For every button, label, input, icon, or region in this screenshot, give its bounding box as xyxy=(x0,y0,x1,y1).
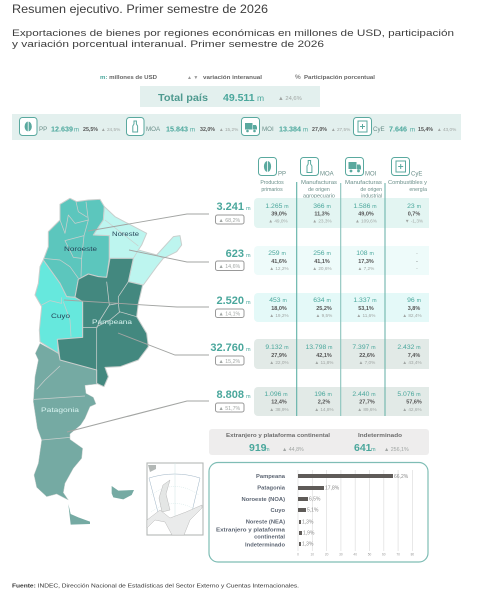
region: Noroeste xyxy=(43,198,109,297)
values Noroeste: ▼ -1,3% xyxy=(405,218,423,224)
values Pampeana: ▲ 7,0% xyxy=(359,360,375,365)
column: CyE: energía xyxy=(409,187,427,193)
values Patagonia: ▲ 89,6% xyxy=(357,407,377,412)
subtitle: y variación porcentual interanual. Primer semestre de 2026 xyxy=(12,39,324,50)
values Cuyo: 634 m xyxy=(313,297,331,304)
values Noreste: - xyxy=(416,251,418,257)
total Pampeana: 32.760 xyxy=(210,342,244,354)
bar values: 17,8% xyxy=(325,486,340,492)
values Pampeana: ▲ 22,0% xyxy=(269,360,289,365)
values Pampeana xyxy=(265,344,422,365)
subtitle xyxy=(12,28,454,50)
values Cuyo: 1.337 m xyxy=(353,297,377,304)
values Cuyo: ▲ 11,6% xyxy=(357,313,375,318)
total país: ▲ 24,6% xyxy=(278,96,302,102)
column: MOA: Manufacturas xyxy=(301,180,337,186)
values Patagonia: 12,4% xyxy=(271,400,287,406)
legend xyxy=(100,74,376,81)
values Pampeana: ▲ 11,8% xyxy=(315,360,333,365)
values Noreste: 41,6% xyxy=(271,259,287,265)
total país xyxy=(140,86,320,107)
bars xyxy=(298,474,393,546)
region labels: Cuyo xyxy=(51,313,70,320)
values Pampeana: 9.132 m xyxy=(265,344,289,351)
values Pampeana: ▲ 43,4% xyxy=(402,360,422,365)
row backgrounds xyxy=(254,198,429,416)
values Patagonia: ▲ 42,6% xyxy=(402,407,422,412)
values Patagonia: 27,7% xyxy=(359,400,375,406)
total Noreste: 623 xyxy=(226,248,244,260)
values Noreste: - xyxy=(416,266,418,272)
values Patagonia: 2,2% xyxy=(318,400,330,406)
column: MOI xyxy=(345,158,382,200)
x axis: 20 xyxy=(325,552,329,556)
values Noroeste: 1.265 m xyxy=(265,203,289,210)
bar labels: Patagonia xyxy=(257,486,286,492)
panel: extranjero e indeterminado xyxy=(209,429,429,455)
values Patagonia: 196 m xyxy=(314,391,332,398)
column: MOI: MOI xyxy=(365,172,377,178)
values Cuyo: ▲ 82,4% xyxy=(402,313,422,318)
total Noreste: m xyxy=(246,253,251,259)
MOI summary xyxy=(242,118,350,136)
column: MOI: Manufacturas xyxy=(345,180,382,186)
column headers xyxy=(258,158,427,200)
x axis: 40 xyxy=(353,552,357,556)
total Patagonia: m xyxy=(246,394,251,400)
values Noreste: ▲ 12,2% xyxy=(269,266,289,271)
CyE summary: 7.646 xyxy=(389,124,407,134)
values Pampeana: 7,4% xyxy=(408,353,420,359)
PP summary: 12.639 xyxy=(51,124,73,134)
MOA summary xyxy=(126,118,238,136)
total Noroeste: 3.241 xyxy=(216,201,244,213)
values Cuyo: ▲ 9,5% xyxy=(316,313,332,318)
values Noroeste: 49,0% xyxy=(358,212,374,218)
total Pampeana: m xyxy=(246,347,251,353)
legend: m: millones de USD xyxy=(100,75,157,81)
panel: extranjero e indeterminado: m xyxy=(371,447,376,453)
legend: Participación porcentual xyxy=(304,75,376,81)
region: Noreste xyxy=(93,207,182,285)
bar values: 66,2% xyxy=(394,474,409,480)
bar labels: Noroeste (NOA) xyxy=(242,497,285,503)
x axis xyxy=(297,552,414,556)
inset map: Antarctic sector xyxy=(147,463,203,535)
column: PP: Productos xyxy=(260,180,284,186)
values Pampeana: 22,6% xyxy=(359,353,375,359)
region labels: Patagonia xyxy=(41,407,79,414)
values Cuyo xyxy=(269,297,422,318)
values Noreste: 108 m xyxy=(356,250,374,257)
values Cuyo: 25,2% xyxy=(316,306,332,312)
title: Resumen ejecutivo. Primer semestre de 2026 xyxy=(12,4,268,16)
MOI summary: 27,0% xyxy=(312,127,327,133)
MOA summary: m xyxy=(190,128,195,134)
bar chart: participación por región xyxy=(209,462,428,562)
region labels: Noroeste xyxy=(64,246,97,253)
leader lines xyxy=(64,214,209,432)
column: MOI: industrial xyxy=(361,194,382,200)
x axis: 50 xyxy=(368,552,371,556)
values Pampeana: 13.798 m xyxy=(305,344,333,351)
region: Cuyo xyxy=(35,260,83,353)
total Noroeste: m xyxy=(246,206,251,212)
values Noreste: 256 m xyxy=(313,250,331,257)
x axis: 80 xyxy=(411,552,414,556)
bar values: 1,9% xyxy=(303,530,315,536)
values Pampeana: 42,1% xyxy=(316,353,332,359)
x axis: 70 xyxy=(396,552,400,556)
values Noroeste: ▲ 49,0% xyxy=(268,218,288,224)
column: CyE xyxy=(388,158,427,193)
column dividers xyxy=(297,182,385,416)
panel: extranjero e indeterminado: Extranjero y plataforma continental xyxy=(226,433,331,439)
MOI summary: ▲ 27,5% xyxy=(331,127,350,132)
MOI summary: m xyxy=(303,128,308,134)
CyE summary xyxy=(354,118,456,136)
sector strip xyxy=(12,114,461,140)
MOA summary: MOA xyxy=(146,126,161,133)
bar labels: continental xyxy=(254,534,285,540)
values Noroeste: 0,7% xyxy=(408,212,420,218)
bar labels: Indeterminado xyxy=(245,542,285,548)
row: Pampeana xyxy=(210,342,422,365)
values Pampeana: 7.397 m xyxy=(352,344,376,351)
source note: Fuente: INDEC, Dirección Nacional de Estadísticas del Sector Externo y Cuentas Internacionales. xyxy=(12,584,299,590)
bar values: 1,3% xyxy=(302,542,314,548)
values Noroeste: 1.586 m xyxy=(353,203,377,210)
column: MOI: de origen xyxy=(360,187,382,193)
panel: extranjero e indeterminado: ▲ 256,1% xyxy=(384,447,409,453)
row: Noroeste xyxy=(216,201,423,224)
CyE summary: 15,4% xyxy=(418,127,433,133)
values Cuyo: 18,0% xyxy=(271,306,287,312)
values Cuyo: ▲ 19,2% xyxy=(269,313,289,318)
values Noroeste xyxy=(265,203,423,224)
column: CyE: Combustibles y xyxy=(388,180,427,186)
total país: 49.511 xyxy=(223,92,255,104)
values Noreste: ▲ 20,6% xyxy=(312,266,332,271)
MOA summary: 32,0% xyxy=(200,127,215,133)
total Patagonia: 8.808 xyxy=(216,389,244,401)
bar values: 1,3% xyxy=(302,520,314,526)
region labels xyxy=(41,231,139,414)
MOA summary: ▲ 15,2% xyxy=(219,127,238,132)
values Cuyo: 453 m xyxy=(269,297,287,304)
column: MOA: agropecuario xyxy=(303,194,335,200)
values Noroeste: ▲ 23,3% xyxy=(312,218,332,224)
PP summary: ▲ 24,5% xyxy=(101,127,120,132)
PP summary: 25,5% xyxy=(83,127,98,133)
bar values: 6,5% xyxy=(309,496,321,502)
total Patagonia xyxy=(216,389,251,412)
row: Cuyo xyxy=(216,295,422,318)
CyE summary: m xyxy=(410,128,415,134)
values Noroeste: 11,3% xyxy=(314,212,330,218)
panel: extranjero e indeterminado: Indeterminado xyxy=(358,433,402,439)
values Noreste xyxy=(268,250,418,272)
values Noreste: 17,3% xyxy=(358,259,374,265)
total Cuyo: ▲ 14,1% xyxy=(218,311,241,317)
x axis: 30 xyxy=(339,552,343,556)
bar labels: Noreste (NEA) xyxy=(246,520,285,526)
MOA summary: 15.843 xyxy=(166,124,188,134)
total país: Total país xyxy=(158,93,208,104)
values Noreste: ▲ 7,2% xyxy=(358,266,374,271)
row: Noreste xyxy=(216,248,418,272)
values Noroeste: ▲ 109,6% xyxy=(355,218,377,224)
total Cuyo: 2.520 xyxy=(216,295,244,307)
legend: variación interanual xyxy=(203,75,263,81)
column: MOA: de origen xyxy=(308,187,330,193)
total Noroeste xyxy=(216,201,251,224)
values Noroeste: 366 m xyxy=(313,203,331,210)
values Patagonia: ▲ 38,9% xyxy=(269,407,289,412)
column: PP xyxy=(258,158,286,193)
values Patagonia: 1.096 m xyxy=(264,391,288,398)
values Cuyo: 53,1% xyxy=(358,306,374,312)
row: Patagonia xyxy=(216,389,422,412)
values Pampeana: 2.432 m xyxy=(397,344,421,351)
values Pampeana: 27,9% xyxy=(271,353,287,359)
MOI summary: MOI xyxy=(262,126,274,133)
panel: extranjero e indeterminado: 641 xyxy=(354,442,372,454)
region labels: Noreste xyxy=(112,231,139,238)
bar labels xyxy=(216,474,286,548)
region: Patagonia xyxy=(33,343,134,525)
panel: extranjero e indeterminado: m xyxy=(265,447,270,453)
values Noroeste: 39,0% xyxy=(271,212,287,218)
region labels: Pampeana xyxy=(92,319,132,326)
values Noroeste: 23 m xyxy=(407,203,421,210)
PP summary: m xyxy=(74,128,79,134)
total Patagonia: ▲ 51,7% xyxy=(218,406,241,412)
panel: extranjero e indeterminado: ▲ 44,8% xyxy=(282,447,304,453)
total Noreste xyxy=(216,248,251,270)
values Patagonia: ▲ 14,8% xyxy=(314,407,334,412)
bar values xyxy=(302,474,409,548)
column: PP: primarios xyxy=(261,187,283,193)
x axis: 10 xyxy=(311,552,314,556)
values Patagonia: 5.076 m xyxy=(397,391,421,398)
bar values: 5,1% xyxy=(307,508,319,514)
values Patagonia: 57,6% xyxy=(406,400,422,406)
values Noreste: - xyxy=(416,259,418,265)
bar labels: Pampeana xyxy=(256,474,286,480)
total Pampeana: ▲ 15,2% xyxy=(218,359,241,365)
total Cuyo xyxy=(216,295,251,318)
total Pampeana xyxy=(210,342,251,365)
values Cuyo: 3,8% xyxy=(408,306,420,312)
values Noreste: 259 m xyxy=(268,250,286,257)
map of Argentina xyxy=(33,198,209,535)
region: Pampeana xyxy=(57,258,148,387)
total Noreste: ▲ 14,6% xyxy=(218,264,241,270)
total Cuyo: m xyxy=(246,300,251,306)
panel: extranjero e indeterminado: 919 xyxy=(249,442,267,454)
legend: % xyxy=(295,74,301,81)
x axis: 60 xyxy=(382,552,386,556)
PP summary xyxy=(20,118,120,136)
total Noroeste: ▲ 68,2% xyxy=(218,218,241,224)
total país: m xyxy=(257,93,264,103)
MOI summary: 13.384 xyxy=(279,124,301,134)
values Cuyo: 96 m xyxy=(407,297,421,304)
CyE summary: ▲ 43,0% xyxy=(437,127,456,132)
column: MOA xyxy=(300,158,337,200)
column: CyE: CyE xyxy=(411,172,422,178)
x axis: 0 xyxy=(297,552,299,556)
values Noreste: 41,1% xyxy=(314,259,330,265)
values Patagonia: 2.440 m xyxy=(352,391,376,398)
bar labels: Extranjero y plataforma xyxy=(216,528,286,534)
column: PP: PP xyxy=(278,172,286,178)
column: MOA: MOA xyxy=(320,172,334,178)
values Patagonia xyxy=(264,391,422,412)
northern and central regions xyxy=(35,198,182,387)
subtitle: Exportaciones de bienes por regiones económicas en millones de USD, participación xyxy=(12,28,454,39)
PP summary: PP xyxy=(39,126,47,133)
bar labels: Cuyo xyxy=(270,508,285,514)
legend: ▲ ▼ xyxy=(187,75,198,81)
CyE summary: CyE xyxy=(373,126,385,133)
